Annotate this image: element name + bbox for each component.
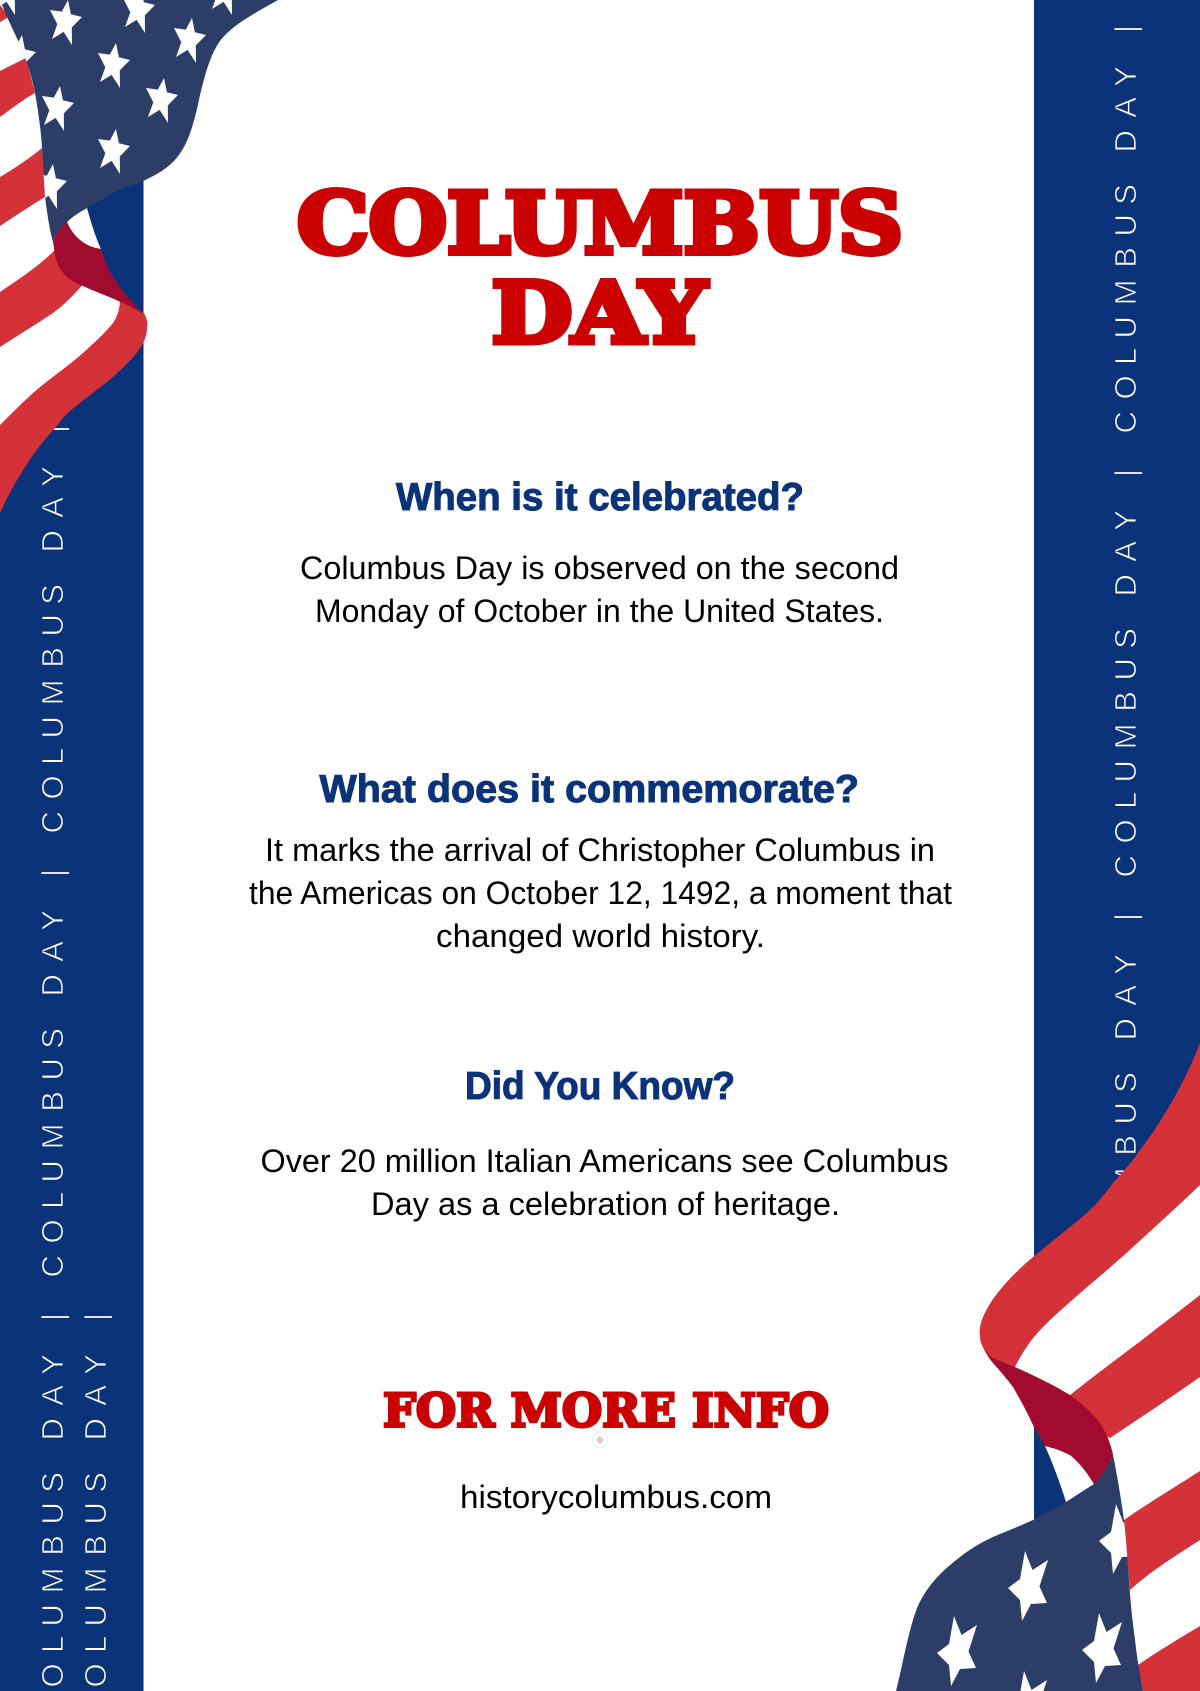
- flag stars: [0, 0, 242, 209]
- heading: for more info: FOR MORE INFO: [383, 1384, 829, 1438]
- flag: bottom-right corner: [896, 1043, 1200, 1691]
- body text: changed world history.: [436, 918, 765, 954]
- flag white tail behind fold: [1045, 1446, 1094, 1502]
- flag crimson fold: [981, 1343, 1113, 1484]
- section: did you know: [260, 1065, 948, 1222]
- panel: left blue band with vertical text: [0, 0, 144, 1691]
- flag red stripes: [0, 5, 147, 513]
- body text: Monday of October in the United States.: [315, 593, 884, 629]
- flag: top-left corner: [0, 0, 278, 513]
- section: what does it commemorate: [249, 768, 952, 954]
- website text: historycolumbus.com: [460, 1479, 772, 1515]
- body text: It marks the arrival of Christopher Columbus in: [265, 832, 935, 868]
- panel: right blue band with vertical text: [1034, 0, 1200, 1691]
- flag crimson fold: [53, 222, 144, 315]
- title: COLUMBUS: [297, 174, 903, 273]
- body text: Over 20 million Italian Americans see Columbus: [260, 1143, 948, 1179]
- body text: Columbus Day is observed on the second: [300, 550, 899, 586]
- flag navy canton: [896, 1455, 1143, 1691]
- body text: Day as a celebration of heritage.: [371, 1186, 840, 1222]
- band text column: COLUMBUS DAY |: [1108, 469, 1143, 878]
- flag white tail behind fold: [67, 208, 101, 249]
- band text column: COLUMBUS DAY |: [1108, 25, 1143, 434]
- title: [297, 174, 903, 362]
- flag red stripes: [980, 1043, 1200, 1691]
- heading: What does it commemorate?: [320, 768, 859, 811]
- heading: Did You Know?: [465, 1065, 735, 1108]
- body text: [260, 1143, 948, 1222]
- band text column 1: COLUMBUS DAY |: [35, 869, 70, 1278]
- section: when is it celebrated: [300, 476, 899, 629]
- band text column: COLUMBUS DAY |: [1108, 913, 1143, 1322]
- band text column 1: [35, 0, 70, 1691]
- flag white field: [0, 0, 128, 440]
- body text: [249, 832, 952, 954]
- small target mark: [592, 1432, 608, 1448]
- flag navy canton: [0, 0, 278, 242]
- band text column 1: COLUMBUS DAY |: [35, 425, 70, 834]
- band text column: [1108, 25, 1143, 1322]
- flag stars: [937, 1504, 1139, 1691]
- body text: [300, 550, 899, 629]
- title: DAY: [492, 264, 708, 362]
- flag white field: [1000, 1150, 1200, 1691]
- body text: the Americas on October 12, 1492, a moment that: [249, 875, 952, 911]
- heading: When is it celebrated?: [396, 476, 804, 519]
